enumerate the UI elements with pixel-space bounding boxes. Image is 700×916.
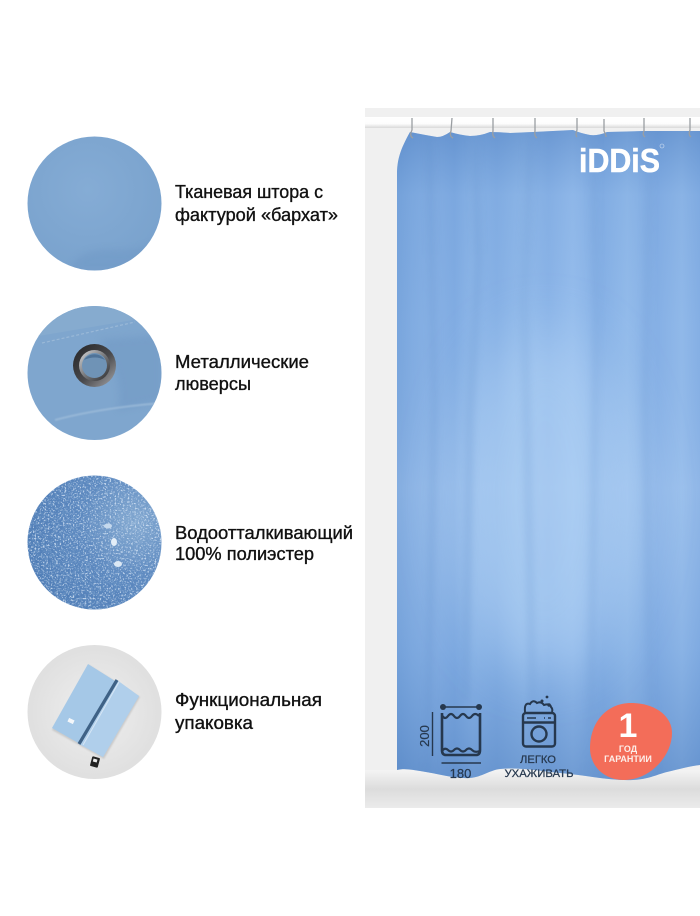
feature text: fabric: [175, 182, 338, 225]
feature text: grommets: [175, 352, 309, 394]
warranty caption: [604, 744, 652, 764]
dimensions icon: [417, 704, 482, 781]
circle photo: metal grommet: [27, 306, 162, 441]
curtain fabric: [397, 128, 700, 788]
height label: 200: [417, 725, 432, 747]
circle photo: packaging: [27, 645, 162, 780]
warranty badge: [590, 703, 672, 780]
washing label: УХАЖИВАТЬ: [504, 768, 574, 780]
feature text: water repellent: [175, 523, 353, 564]
curtain glyph: [440, 704, 482, 755]
feature text: packaging: [175, 690, 322, 733]
feature text: packaging: упаковка: [175, 713, 254, 733]
feature text: fabric: Тканевая штора с: [175, 182, 323, 202]
warranty caption: ГОД: [619, 744, 638, 754]
feature text: water repellent: Водоотталкивающий: [175, 523, 353, 543]
feature text: packaging: Функциональная: [175, 690, 322, 710]
icon: grommet: [73, 344, 116, 387]
feature text: fabric: фактурой «бархат»: [175, 205, 338, 225]
washing icon: [504, 696, 574, 780]
washing label: ЛЕГКО: [520, 754, 556, 766]
feature text: grommets: Металлические: [175, 352, 309, 372]
washer glyph: [523, 696, 555, 746]
circle photo: fabric texture: [27, 136, 162, 271]
panel: curtain photo: [365, 108, 700, 808]
circle photo: water droplets: [27, 475, 162, 610]
icon: zip bag: [52, 664, 140, 768]
feature text: water repellent: 100% полиэстер: [175, 544, 314, 564]
curtain rings: [411, 118, 691, 138]
warranty number: 1: [619, 707, 637, 745]
logo registered mark: [660, 144, 664, 148]
warranty caption: ГАРАНТИИ: [604, 754, 652, 764]
width label: 180: [450, 766, 471, 781]
feature text: grommets: люверсы: [175, 374, 251, 394]
washing label: [504, 754, 574, 780]
logo: IDDIS: iDDiS: [579, 142, 660, 179]
